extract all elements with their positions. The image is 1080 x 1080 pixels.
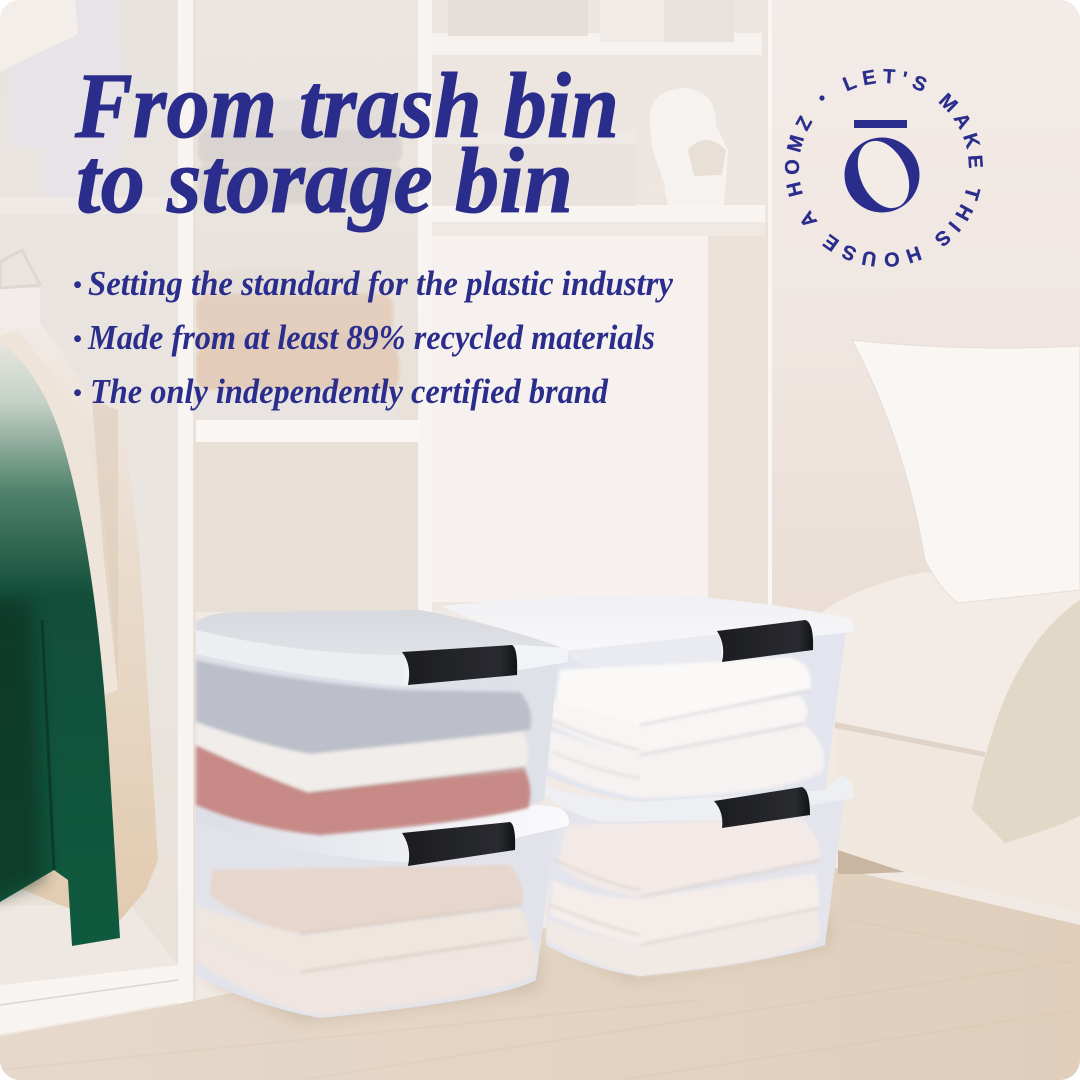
feature bullet list: Made from at least 89% recycled materials [87, 318, 655, 357]
lid of bottom right bin [545, 775, 854, 822]
clear body of top right bin [545, 625, 847, 802]
storage bin: bottom left [196, 800, 569, 1018]
shelf ledge left [0, 197, 178, 214]
wardrobe right section [432, 0, 772, 612]
towels in top right bin [548, 657, 824, 798]
floor [0, 868, 1080, 1080]
handle of top right bin [717, 620, 813, 662]
clear body of bottom right bin [546, 790, 845, 976]
feature bullet list: • [73, 272, 82, 299]
title [74, 72, 616, 232]
cabinet base [0, 939, 178, 1034]
clear body of bottom left bin [196, 815, 556, 1018]
towels in bottom right bin [546, 818, 820, 976]
feature bullet list [73, 264, 673, 411]
folded towels on left upper shelf [198, 126, 402, 204]
brand badge [784, 68, 983, 267]
feature bullet list: • [73, 380, 82, 407]
storage bin: top right [440, 595, 854, 802]
storage bin: top left [196, 610, 569, 836]
title: From trash bin [74, 55, 619, 158]
handle of bottom left bin [402, 822, 515, 866]
folded sweaters on middle shelf [196, 292, 400, 390]
bin shadows on floor [200, 915, 830, 1022]
clear body of top left bin [196, 650, 558, 836]
title: to storage bin [76, 130, 573, 233]
blankets in bottom left bin [196, 865, 537, 1016]
beige coats on hangers [0, 250, 158, 925]
bed [822, 572, 1080, 874]
lid of top right bin [440, 595, 854, 668]
handle of top left bin [402, 645, 517, 685]
feature bullet list: The only independently certified brand [90, 372, 608, 411]
storage bin: bottom right [545, 775, 854, 976]
floor planks [2, 1044, 262, 1070]
feature bullet list: Setting the standard for the plastic industry [88, 264, 673, 303]
handle of bottom right bin [714, 787, 810, 828]
blankets in top left bin [196, 660, 531, 835]
decorative items on upper shelves [432, 33, 734, 206]
lid of top left bin [196, 610, 569, 658]
feature bullet list: • [73, 326, 82, 353]
hanging white towel [0, 0, 78, 72]
pillow [852, 340, 1080, 603]
circular slogan: LET'S MAKE THIS HOUSE A HOMZ [784, 68, 983, 267]
bed throw blanket [972, 600, 1080, 843]
cabinet panels and shelf [178, 0, 432, 1004]
logo mark [844, 120, 920, 216]
green hoodie [0, 342, 120, 946]
lid of bottom left bin [196, 800, 569, 862]
